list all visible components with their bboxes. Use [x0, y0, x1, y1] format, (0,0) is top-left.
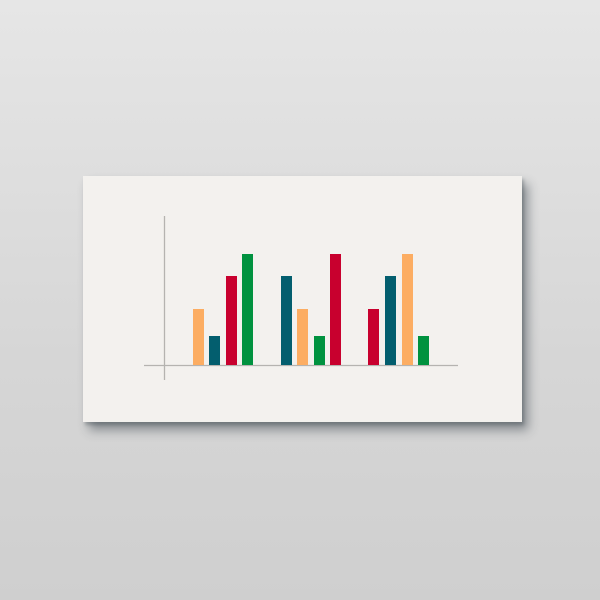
group 3 bars [368, 254, 429, 365]
axes [144, 216, 458, 380]
card panel with bar chart [83, 176, 522, 422]
group 2 bars [281, 254, 341, 365]
bar chart [144, 216, 458, 380]
group 1 bars [193, 254, 253, 365]
